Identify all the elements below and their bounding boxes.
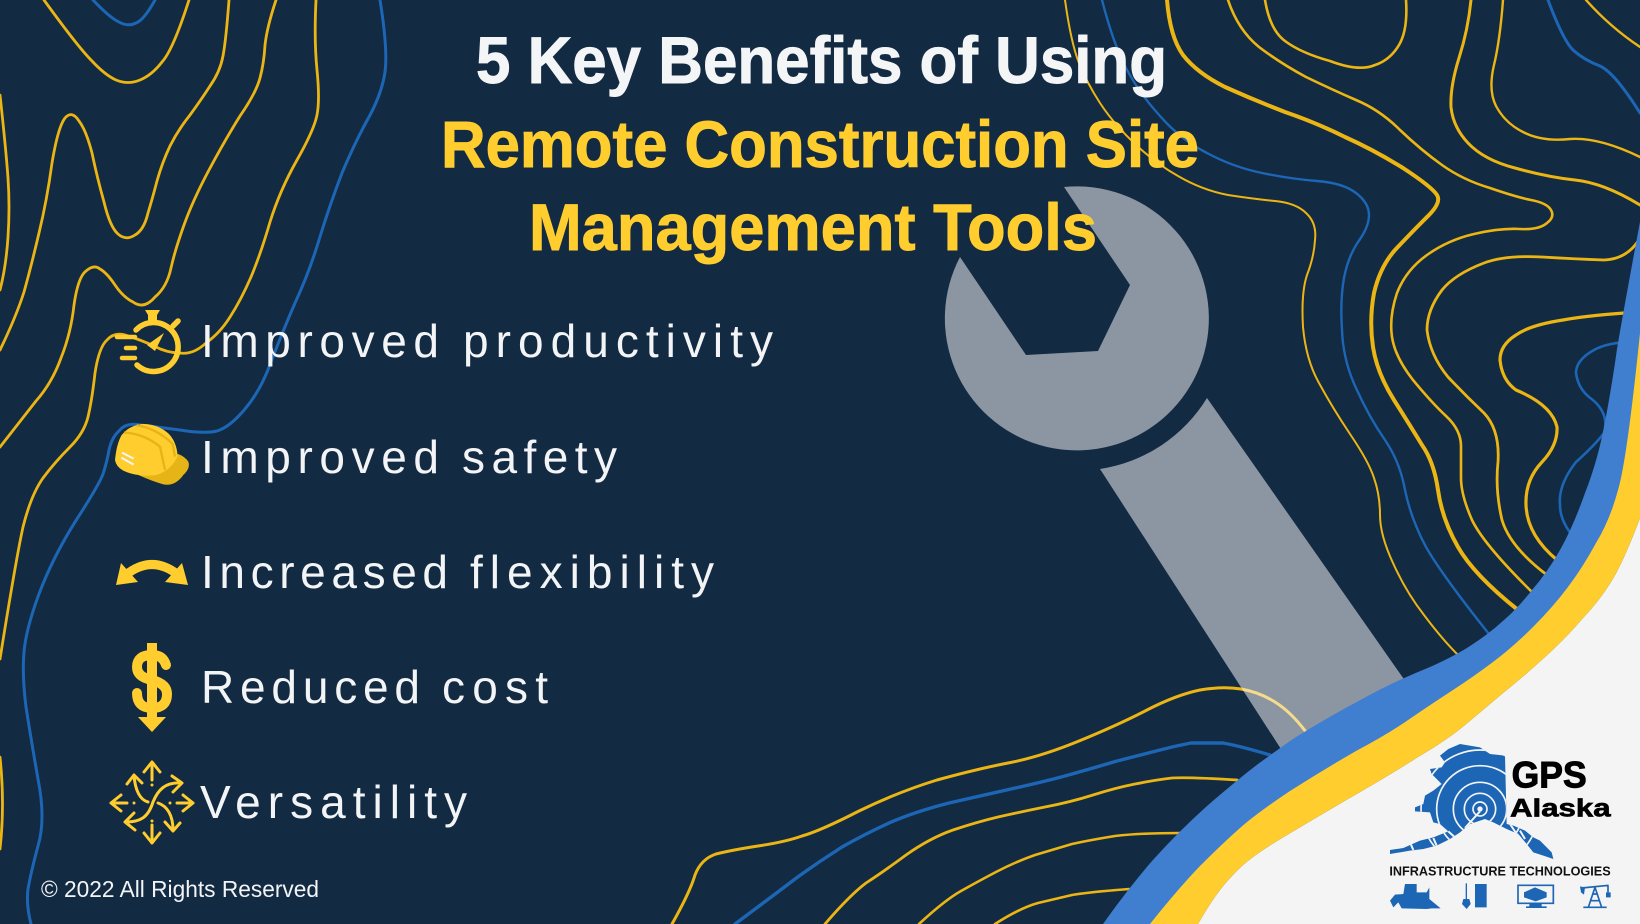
label: improved safety: Improved — [201, 431, 439, 483]
label: improved productivity: productivity — [463, 315, 773, 367]
benefit: improved productivity — [117, 310, 773, 372]
label: improved safety: safety — [462, 431, 617, 483]
logo text: GPS: GPS — [1512, 754, 1587, 795]
label: increased flexibility: flexibility — [470, 546, 714, 598]
icon: wrench — [945, 186, 1415, 763]
contour lines: left — [0, 0, 386, 924]
logo mark: Alaska map — [1390, 744, 1553, 868]
benefit: versatility — [111, 762, 467, 843]
ribbon: yellow — [1120, 300, 1640, 924]
contour lines: upper right — [1065, 0, 1640, 655]
logo icons: industries — [1390, 883, 1611, 909]
corner panel: off-white — [1198, 518, 1640, 924]
title — [441, 23, 1199, 264]
icon: hard hat — [115, 424, 189, 485]
logo text: infrastructure technologies: INFRASTRUCTURE TECHNOLOGIES — [1389, 865, 1611, 879]
ribbon: blue — [1103, 222, 1640, 924]
benefit: improved safety — [115, 424, 617, 485]
label: reduced cost: cost — [442, 661, 548, 713]
copyright: © 2022 All Rights Reserved — [41, 876, 319, 902]
icon: multidirectional arrows — [111, 762, 193, 843]
benefit: reduced cost — [137, 643, 548, 732]
benefit: increased flexibility — [116, 546, 714, 598]
logo text: Alaska: Alaska — [1510, 795, 1612, 823]
label: increased flexibility: Increased — [201, 546, 448, 598]
icon: curved double arrow — [116, 563, 188, 585]
label: versatility: Versatility — [200, 776, 467, 828]
logo: GPS Alaska — [1389, 744, 1612, 909]
title line 3: Management Tools — [529, 190, 1097, 264]
label: improved productivity: Improved — [201, 315, 439, 367]
label: reduced cost: Reduced — [201, 661, 420, 713]
contour lines: bottom — [672, 688, 1306, 924]
title line 2: Remote Construction Site — [441, 107, 1199, 181]
icon: stopwatch — [117, 310, 178, 372]
title line 1: 5 Key Benefits of Using — [476, 23, 1167, 97]
icon: dollar with down arrow — [137, 643, 167, 732]
